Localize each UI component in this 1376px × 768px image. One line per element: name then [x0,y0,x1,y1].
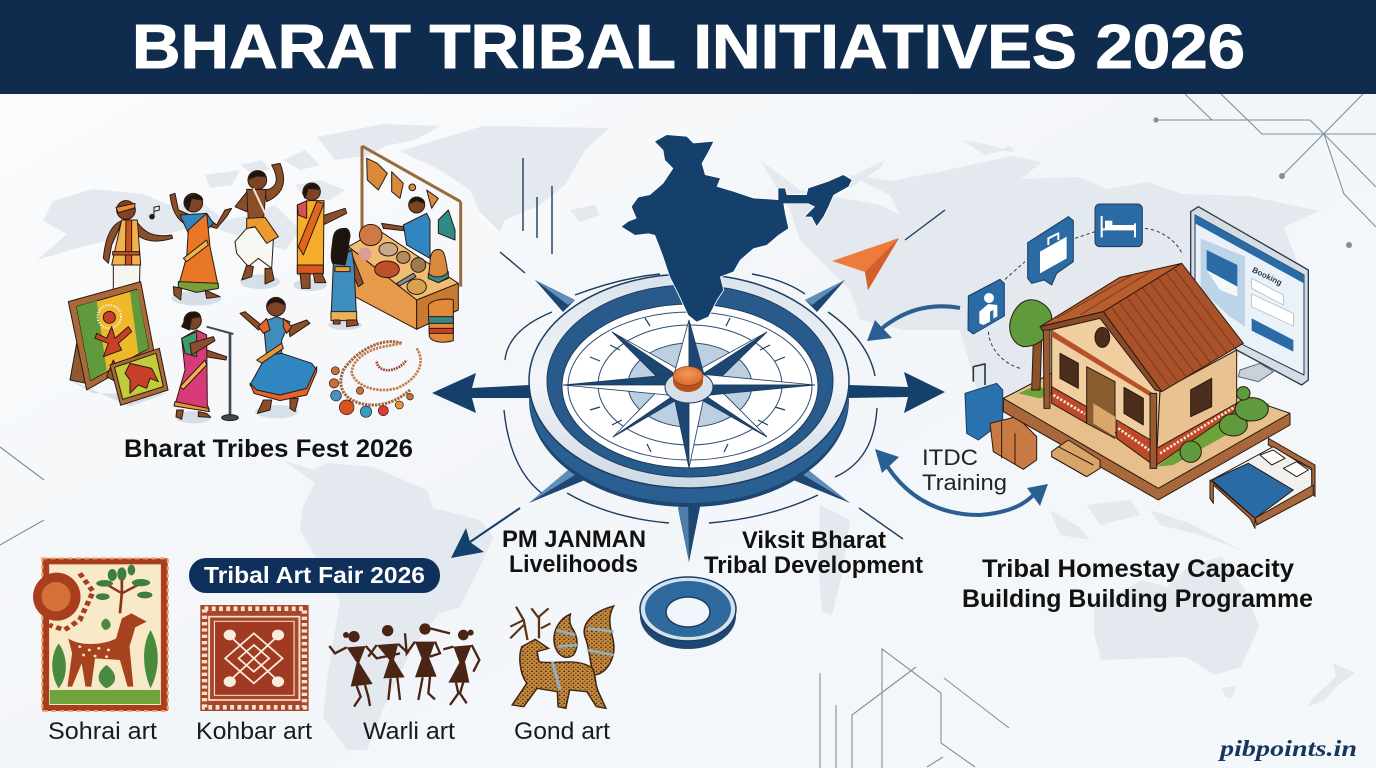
art captions: Gond art [514,718,610,745]
heading pill: Tribal Art Fair 2026 [204,562,425,588]
center: compass [529,274,850,562]
ground shadows [63,274,362,423]
homestay illustration [965,204,1315,528]
compass letters: N [594,318,600,328]
artwork: warli [329,623,479,707]
label: tribal homestay programme: Tribal Homestay Capacity [982,555,1294,583]
text: Training [922,470,1007,495]
heading pill [189,558,440,593]
arrow: east to homestay [849,372,945,413]
compass letters: S [780,442,786,452]
lens ring at compass base [640,577,736,649]
label: viksit bharat tribal development: Viksit Bharat [742,527,886,554]
figure: woman in yellow sari [297,183,347,288]
icon: orange direction arrow [832,238,899,290]
compass face [562,304,818,468]
monitor: Booking [1251,265,1284,288]
icon: bed [1095,204,1142,247]
compass letters: W [551,380,560,390]
dashed connector [988,228,1183,368]
monitor [1191,207,1308,385]
artwork: sohrai [33,558,168,711]
compass letters: E [821,380,827,390]
title banner: BHARAT TRIBAL INITIATIVES 2026 [132,13,1245,82]
center: compass decorative lines and arcs [500,158,945,539]
label: ITDC training: ITDC [922,445,978,470]
arrow: west to festival [432,373,530,413]
panel: tribal art fair [33,558,614,745]
luggage [965,364,1037,469]
label: viksit bharat tribal development [704,527,923,579]
label: tribal homestay programme: Building Building Programme [962,585,1313,613]
watermark: pibpoints.in [1218,736,1357,761]
house walls [1052,313,1237,465]
necklace [329,342,421,417]
label: viksit bharat tribal development: Tribal Development [704,552,923,579]
compass outer spikes [529,280,850,562]
compass letters: S [686,469,692,479]
tree [1010,300,1052,390]
bed [1210,438,1315,528]
label: PM JANMAN livelihoods: PM JANMAN [502,526,646,553]
compass hub [665,371,713,403]
compass letters [551,318,827,479]
arrow: to tribal art fair [451,508,520,558]
compass base [529,293,849,507]
festival illustration [63,146,461,423]
art captions: Warli art [363,718,455,745]
arrow: ITDC training curve [875,449,1048,515]
steps [1052,440,1100,477]
platform [1003,348,1290,500]
arrow: from homestay to compass [867,306,960,341]
label: tribal homestay programme [962,555,1313,613]
label: PM JANMAN livelihoods [502,526,646,578]
roof [1040,263,1243,468]
world map backdrop [37,124,1355,750]
figure: blue skirt dancer [240,297,317,413]
paintings [68,282,168,405]
title banner [0,0,1376,94]
icon: luggage bubble [1028,217,1073,285]
artwork: kohbar [200,605,309,711]
art captions: Sohrai art [48,718,157,745]
compass letters: N [780,318,786,328]
artwork: gond [510,606,614,708]
compass ring [529,274,849,488]
figure: singer with microphone [174,312,238,421]
figure: woman shopper [331,228,363,327]
india map [622,135,852,322]
label: bharat tribes fest: Bharat Tribes Fest 2026 [124,435,413,463]
icon: person [968,279,1004,334]
compass letters: S [594,442,600,452]
figure: male dancer in white dhoti [235,163,284,284]
shrubs [1180,387,1268,462]
compass rose [563,320,815,468]
art captions [48,718,610,745]
label: PM JANMAN livelihoods: Livelihoods [509,551,638,578]
figure: dancer in orange sari [170,193,232,300]
art captions: Kohbar art [196,718,312,745]
market stall [348,146,461,342]
figure: man with headband [103,201,173,290]
